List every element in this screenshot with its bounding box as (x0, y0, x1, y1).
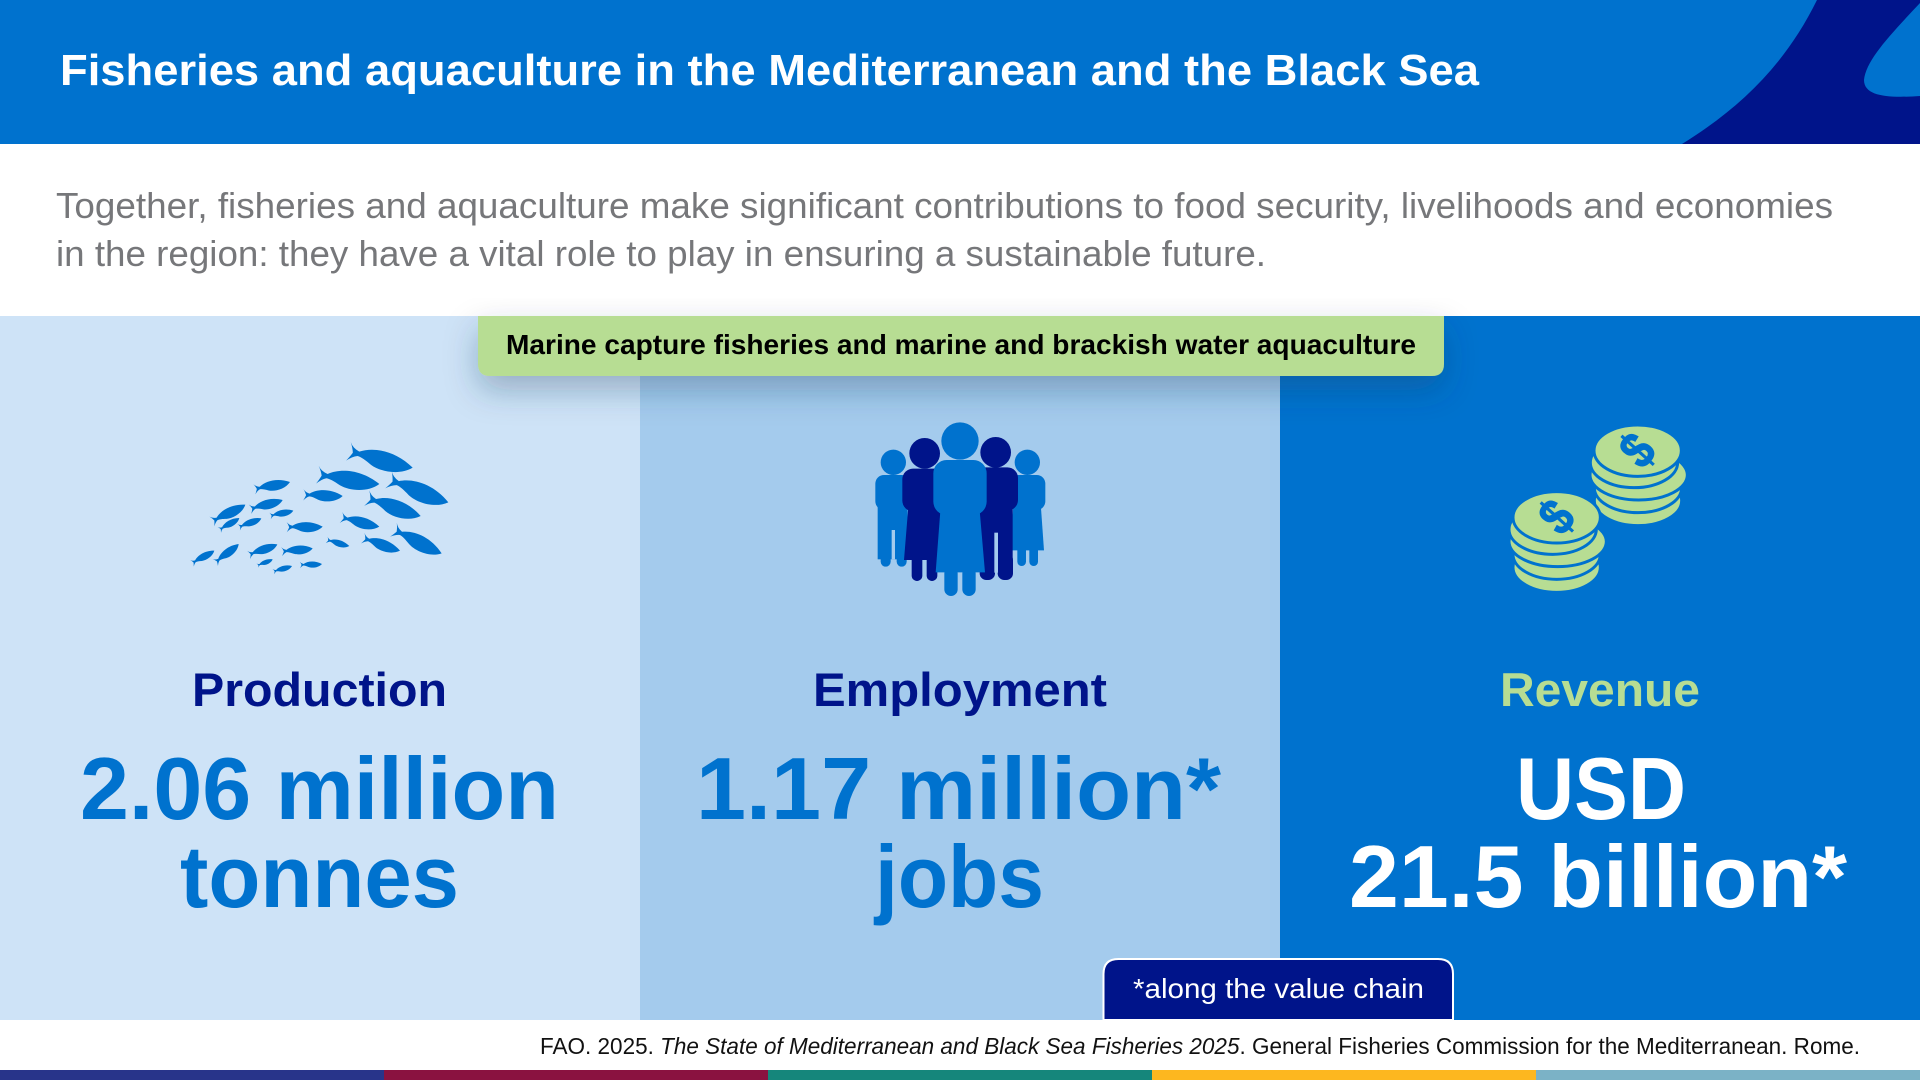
intro text: in the region: they have a vital role to play in ensuring a sustainable future. (56, 233, 1266, 274)
figure: employment (696, 739, 1222, 926)
source citation: FAO. 2025. The State of Mediterranean and Black Sea Fisheries 2025. General Fisheries Commission for the Mediterranean. Rome. (540, 1033, 1860, 1059)
heading: employment: Employment (813, 663, 1107, 716)
icon: school of fish (190, 442, 452, 574)
figure: production: 2.06 million (80, 739, 559, 838)
banner: scope label: Marine capture fisheries and marine and brackish water aquaculture (506, 329, 1416, 360)
panel: revenue (1280, 316, 1920, 1020)
figure: production (80, 739, 559, 926)
header banner (0, 0, 1920, 144)
header navy wave (1682, 0, 1920, 144)
icon: group of people (875, 422, 1045, 596)
icon: stacks of coins (1509, 423, 1687, 592)
intro text (56, 185, 1833, 274)
figure: revenue (1349, 739, 1848, 926)
callout: value chain note: *along the value chain (1133, 973, 1424, 1004)
figure: revenue: 21.5 billion* (1349, 827, 1848, 926)
callout: value chain note (1104, 959, 1453, 1020)
banner: scope label (478, 316, 1444, 376)
footer colour strip (0, 1070, 1920, 1080)
title: Fisheries and aquaculture in the Mediterranean and the Black Sea (60, 46, 1480, 95)
heading: production: Production (192, 663, 447, 716)
intro text: Together, fisheries and aquaculture make significant contributions to food security, livelihoods and economies (56, 185, 1833, 226)
header blue lobe (1864, 3, 1920, 97)
figure: production: tonnes (180, 827, 459, 926)
icon: stacks of coins: $ (1608, 423, 1667, 479)
panel: employment (640, 316, 1280, 1020)
icon: stacks of coins: $ (1528, 489, 1587, 546)
figure: revenue: USD (1516, 739, 1686, 838)
panel: production (0, 316, 640, 1020)
figure: employment: jobs (873, 827, 1044, 926)
figure: employment: 1.17 million* (696, 739, 1222, 838)
heading: revenue: Revenue (1500, 663, 1700, 716)
